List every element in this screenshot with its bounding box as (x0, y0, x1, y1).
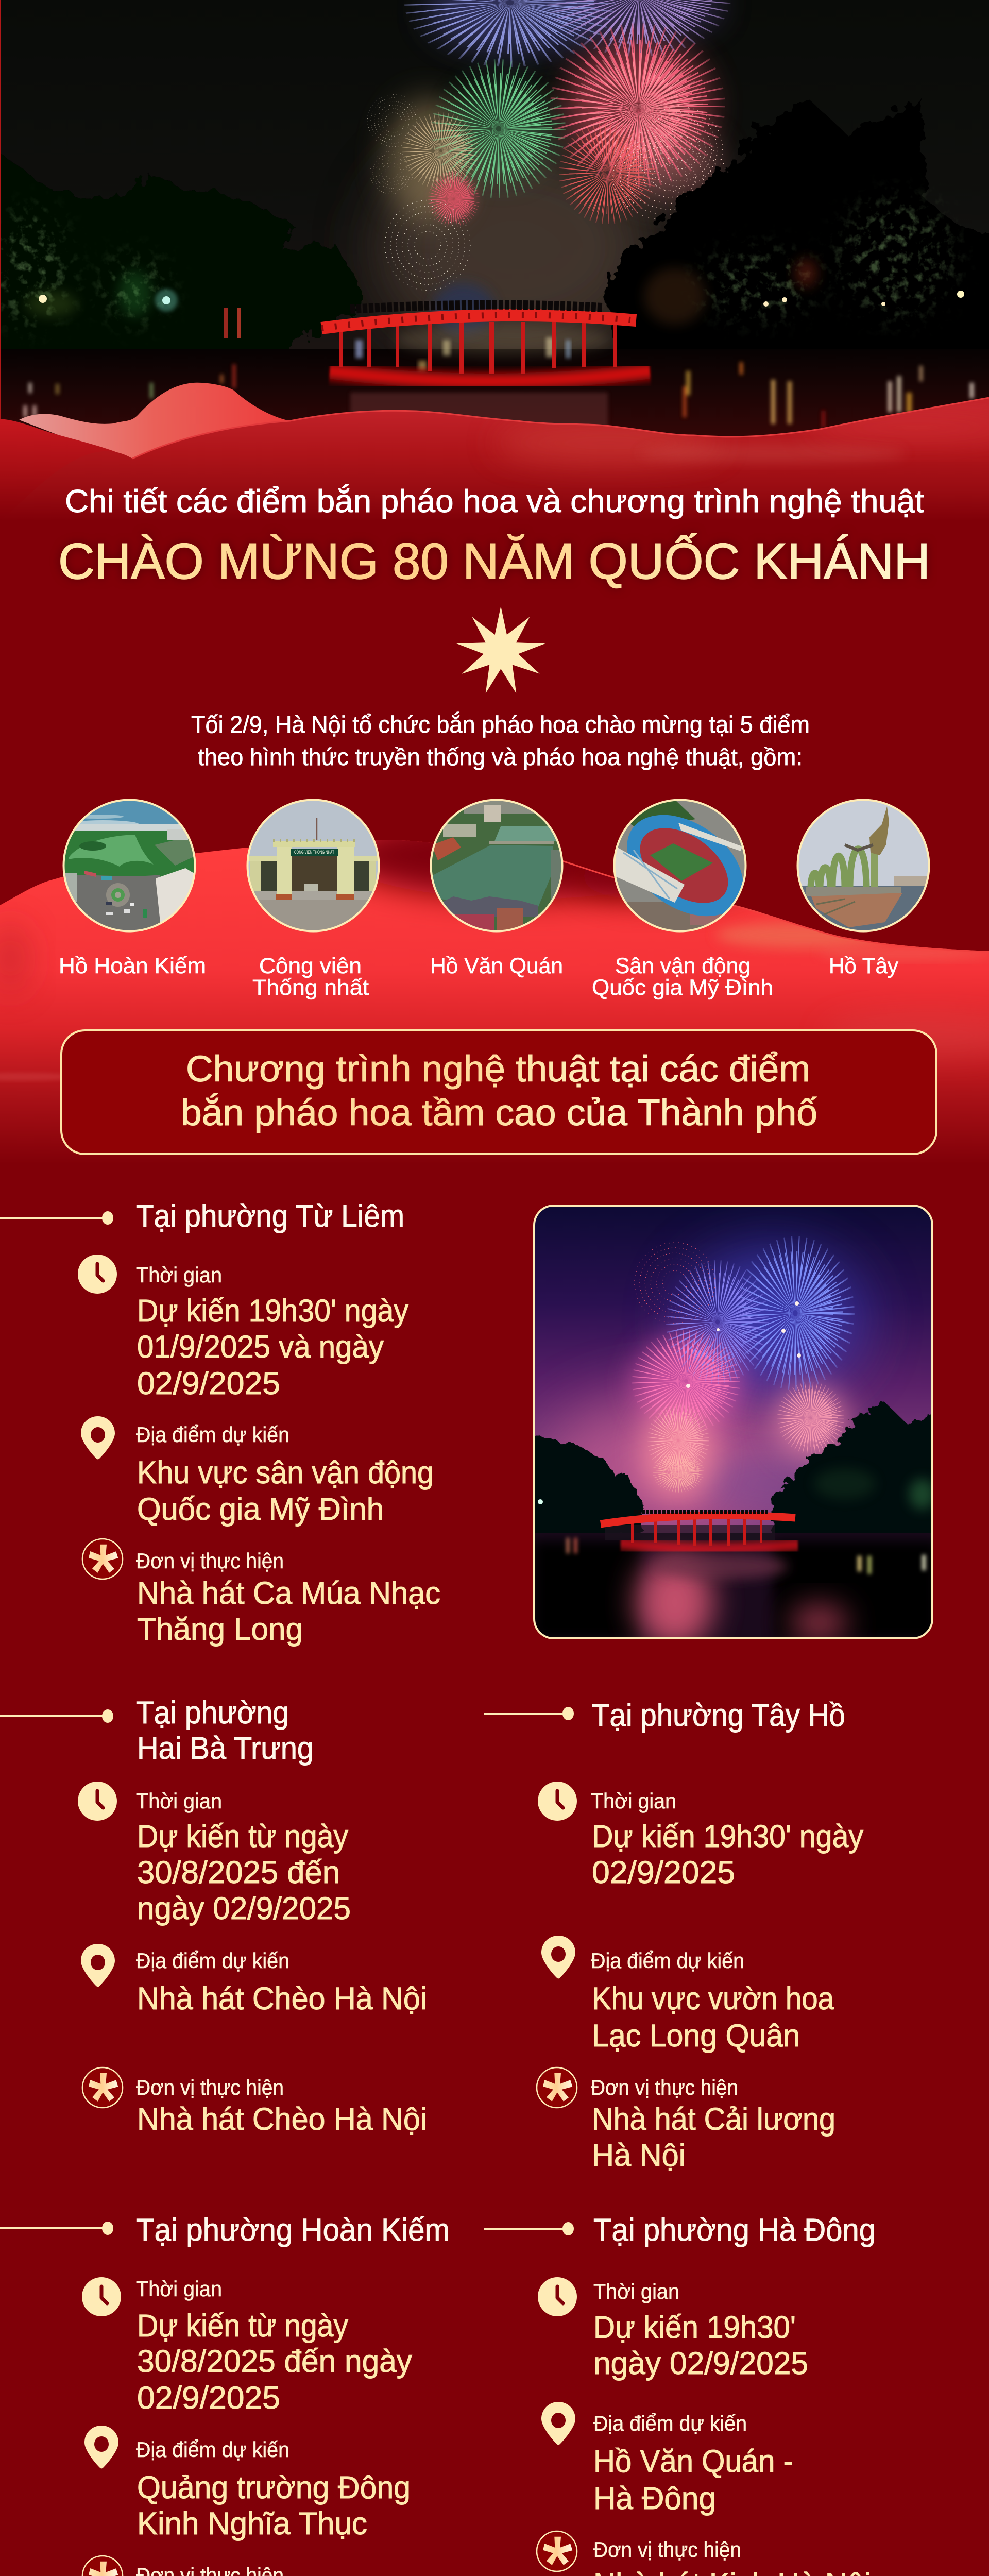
panel: Hai Ba Trung ward (0, 1695, 427, 2137)
venue (136, 2437, 411, 2541)
venue: Hồ Văn Quán - (593, 2444, 793, 2479)
time: Dự kiến từ ngày (137, 1819, 348, 1854)
panel: Tay Ho ward (484, 1698, 863, 2173)
section heading: Tại phường Hà Đông (593, 2212, 876, 2247)
time: Dự kiến từ ngày (137, 2308, 348, 2343)
venue: Địa điểm dự kiến (136, 2437, 289, 2462)
icon: clock (538, 2277, 577, 2316)
panel: Tu Liem ward (0, 1198, 440, 1647)
photo: Cong vien Thong Nhat: CÔNG VIÊN THỐNG NHẤT (294, 849, 334, 855)
performer (136, 1549, 440, 1647)
photo: Cong vien Thong Nhat (246, 799, 381, 936)
performer: Đơn vị thực hiện (593, 2537, 741, 2562)
time (591, 1789, 863, 1890)
location labels: Công viên (259, 954, 362, 978)
section heading: Hai Bà Trưng (137, 1731, 314, 1766)
decorative red silk waves at hero bottom (0, 383, 989, 521)
time (593, 2279, 808, 2381)
icon: asterisk badge (537, 2531, 577, 2571)
venue (591, 1948, 834, 2053)
time: 30/8/2025 đến ngày (137, 2344, 412, 2379)
panel: Ha Dong ward (484, 2212, 876, 2576)
heading: main title: CHÀO MỪNG 80 NĂM QUỐC KHÁNH (58, 533, 930, 589)
section heading: Tại phường (136, 1695, 289, 1730)
heading: subtitle: Chi tiết các điểm bắn pháo hoa và chương trình nghệ thuật (65, 484, 924, 519)
icon: asterisk badge (82, 2067, 123, 2108)
location photos (62, 794, 931, 937)
performer: Nhà hát Cải lương (592, 2102, 835, 2137)
performer: Đơn vị thực hiện (136, 2075, 284, 2099)
icon: asterisk badge (537, 2067, 577, 2108)
venue (136, 1422, 434, 1527)
location labels: Sân vận động (615, 954, 751, 978)
callout: arts programme banner: Chương trình nghệ thuật tại các điểm (186, 1049, 810, 1090)
time: Dự kiến 19h30' (593, 2310, 796, 2345)
venue: Hà Đông (593, 2481, 716, 2516)
performer: Nhà hát Chèo Hà Nội (137, 2102, 427, 2137)
time: 01/9/2025 và ngày (137, 1329, 384, 1364)
icon: clock (78, 1782, 117, 1821)
venue (136, 1948, 427, 2016)
time (136, 2277, 412, 2415)
hero photo: fireworks over The Huc bridge (0, 0, 989, 436)
photo: Ho Tay dragon (796, 799, 931, 934)
performer (593, 2537, 871, 2576)
photo: San van dong Quoc gia My Dinh (608, 794, 762, 937)
time: Thời gian (136, 1789, 222, 1813)
text block: introduction: Tối 2/9, Hà Nội tổ chức bắn pháo hoa chào mừng tại 5 điểm (191, 711, 810, 738)
time (136, 1789, 351, 1926)
performer: Đơn vị thực hiện (591, 2075, 738, 2099)
venue: Địa điểm dự kiến (136, 1422, 289, 1447)
venue: Quốc gia Mỹ Đình (137, 1492, 384, 1527)
icon: nine-pointed star (456, 606, 545, 693)
icon: clock (82, 2277, 121, 2316)
venue: Quảng trường Đông (137, 2470, 411, 2505)
connector line with dot (0, 1211, 113, 1225)
text block: introduction: theo hình thức truyền thống và pháo hoa nghệ thuật, gồm: (198, 743, 803, 770)
performer (591, 2075, 835, 2173)
time: Dự kiến 19h30' ngày (592, 1819, 863, 1854)
time: Dự kiến 19h30' ngày (137, 1293, 408, 1328)
icon: map pin (84, 2426, 118, 2469)
venue: Khu vực sân vận động (137, 1455, 434, 1490)
time: Thời gian (591, 1789, 676, 1813)
venue: Nhà hát Chèo Hà Nội (137, 1981, 427, 2016)
time: 02/9/2025 (137, 1366, 280, 1401)
venue: Lạc Long Quân (592, 2018, 800, 2053)
location labels: Thống nhất (252, 975, 369, 1000)
photo: Ho Van Quan (430, 799, 564, 935)
venue: Địa điểm dự kiến (593, 2411, 747, 2435)
performer: Đơn vị thực hiện (136, 1549, 284, 1573)
time: ngày 02/9/2025 (593, 2346, 808, 2381)
section heading (136, 1695, 314, 1766)
venue (593, 2411, 793, 2516)
icon: map pin (81, 1944, 115, 1987)
icon: map pin (541, 1936, 575, 1978)
venue: Kinh Nghĩa Thục (137, 2506, 367, 2541)
time: Thời gian (593, 2279, 679, 2303)
callout: arts programme banner (61, 1030, 936, 1154)
connector line with dot (0, 1709, 113, 1723)
text block: introduction (191, 711, 810, 770)
section heading: Tại phường Tây Hồ (592, 1698, 845, 1733)
icon: map pin (541, 2402, 575, 2445)
performer (136, 2075, 427, 2137)
location labels: Hồ Văn Quán (430, 954, 563, 978)
time: Thời gian (136, 1263, 222, 1287)
section heading: Tại phường Từ Liêm (136, 1198, 404, 1233)
icon: clock (78, 1255, 117, 1294)
time (136, 1263, 408, 1401)
panel: Hoan Kiem ward (0, 2212, 450, 2576)
venue: Khu vực vườn hoa (592, 1981, 834, 2016)
connector line with dot (0, 2222, 113, 2235)
location labels: Quốc gia Mỹ Đình (592, 975, 773, 1000)
time: 02/9/2025 (137, 2380, 280, 2415)
location labels: Hồ Hoàn Kiếm (59, 954, 206, 978)
time: 30/8/2025 đến (137, 1855, 340, 1890)
location labels (59, 954, 898, 1000)
venue: Địa điểm dự kiến (591, 1948, 744, 1973)
icon: asterisk badge (82, 2556, 123, 2576)
performer: Nhà hát Ca Múa Nhạc (137, 1575, 440, 1611)
time: 02/9/2025 (592, 1855, 735, 1890)
location labels: Hồ Tây (829, 954, 898, 978)
time: Thời gian (136, 2277, 222, 2301)
icon: map pin (81, 1416, 115, 1459)
performer: Thăng Long (137, 1612, 303, 1647)
connector line with dot (484, 1707, 574, 1720)
icon: asterisk badge (82, 1539, 123, 1579)
connector line with dot (484, 2222, 574, 2235)
decorative red ribbon behind location circles (0, 840, 989, 1151)
section heading: Tại phường Hoàn Kiếm (136, 2212, 450, 2247)
icon: clock (538, 1782, 577, 1821)
callout: arts programme banner: bắn pháo hoa tầm cao của Thành phố (181, 1093, 817, 1133)
venue: Địa điểm dự kiến (136, 1948, 289, 1973)
time: ngày 02/9/2025 (137, 1891, 351, 1926)
photo: fireworks over the lake (531, 1205, 937, 1649)
photo: Ho Hoan Kiem (62, 799, 198, 933)
performer: Hà Nội (592, 2138, 686, 2173)
